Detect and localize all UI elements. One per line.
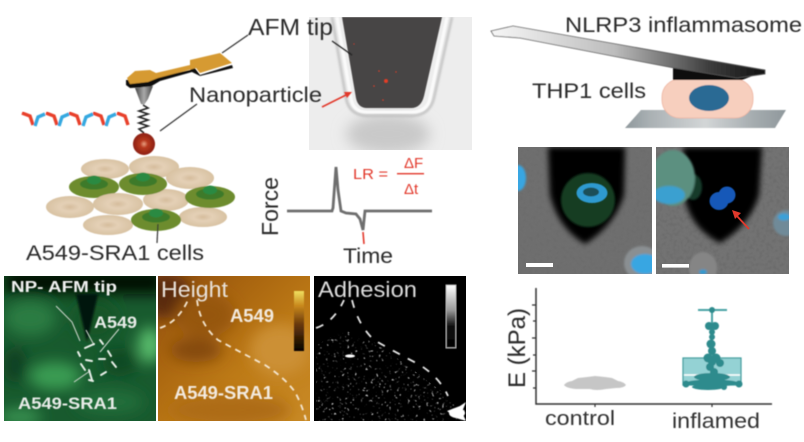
scale bar [526, 263, 553, 267]
NLRP3 cartoon [491, 14, 802, 128]
inflamed box [683, 310, 741, 385]
nucleus ring [576, 183, 608, 203]
label: NLRP3 inflammasome: NLRP3 inflammasome [565, 14, 802, 37]
nucleus [689, 85, 729, 111]
dark AFM tip [342, 17, 442, 108]
gold cantilever [127, 53, 232, 84]
cantilever shadow [126, 65, 233, 88]
glass slide [625, 110, 786, 128]
tip cone [135, 86, 153, 105]
category label: inflamed: inflamed [672, 410, 760, 433]
Time axis label: Time [343, 245, 393, 268]
tip micrograph [309, 17, 472, 154]
red arrow [732, 210, 749, 229]
green cell 2 [119, 172, 167, 195]
loading rate formula: LR = [353, 166, 388, 183]
confocal panel: control [518, 147, 652, 274]
dashed outlines [78, 340, 116, 381]
dark blue nucleus [710, 186, 736, 210]
adhesion map panel [314, 276, 466, 421]
bright spot [345, 354, 466, 421]
label: A549-SRA1 cells: A549-SRA1 cells [26, 242, 204, 265]
colour scale [294, 291, 304, 351]
label: AFM tip: AFM tip [248, 14, 333, 40]
label: Adhesion: Adhesion [318, 277, 417, 302]
loading rate formula: ΔF [404, 155, 423, 172]
neighbour cells [518, 164, 652, 274]
force trace [287, 167, 432, 230]
Y axis label: E (kPa) [504, 308, 531, 388]
rupture marker [363, 232, 364, 244]
green neighbour cell [651, 150, 702, 206]
green cell [561, 173, 615, 227]
labels: AFM cartoon [26, 14, 333, 265]
THP1 cell [662, 79, 753, 118]
AFM tip leader [222, 35, 248, 53]
right neighbour cell [689, 209, 789, 274]
axes [532, 288, 772, 407]
height map panel [158, 276, 310, 421]
green cell 3 [185, 186, 235, 208]
label: Nanoparticle: Nanoparticle [189, 84, 322, 107]
red arrow [322, 92, 352, 107]
fluorescence panel [4, 276, 156, 421]
green cell 4 [131, 208, 181, 231]
scale bar [662, 264, 689, 268]
dashed boundary [160, 300, 306, 420]
aptamer strand [22, 113, 128, 126]
confocal panel: inflamed [656, 147, 789, 274]
black tip block [673, 68, 765, 80]
label: NP-AFM tip: NP- AFM tip [11, 279, 117, 296]
loading rate formula [353, 155, 424, 198]
control violin [564, 376, 626, 390]
label: A549-SRA1: A549-SRA1 [18, 394, 117, 413]
red fluorescence signal [353, 43, 397, 101]
label: A549-SRA1: A549-SRA1 [174, 383, 273, 403]
Force axis label: Force [257, 177, 283, 236]
cell layer [46, 156, 235, 243]
label: THP1 cells: THP1 cells [532, 80, 646, 103]
category label: control: control [545, 408, 615, 430]
label: A549: A549 [230, 306, 274, 326]
greyscale bar [446, 285, 456, 348]
label: A549: A549 [94, 314, 137, 332]
nanoparticle [133, 133, 155, 155]
force curve [257, 155, 432, 268]
adhesion specks [314, 330, 466, 421]
nanoparticle leader [160, 104, 197, 131]
spring linker [139, 105, 148, 133]
loading rate formula: Δt [404, 181, 419, 198]
label: Height: Height [161, 277, 228, 302]
AFM probe cartoon [126, 35, 248, 155]
stiffness chart [504, 288, 772, 433]
annotations [56, 306, 119, 382]
cantilever [491, 26, 765, 78]
green cell 1 [69, 176, 119, 198]
inflamed data points [682, 307, 742, 390]
dark tip shadow [76, 294, 98, 342]
cell leader [157, 224, 158, 243]
micrograph leader [332, 41, 352, 55]
dashed boundary [316, 300, 448, 396]
